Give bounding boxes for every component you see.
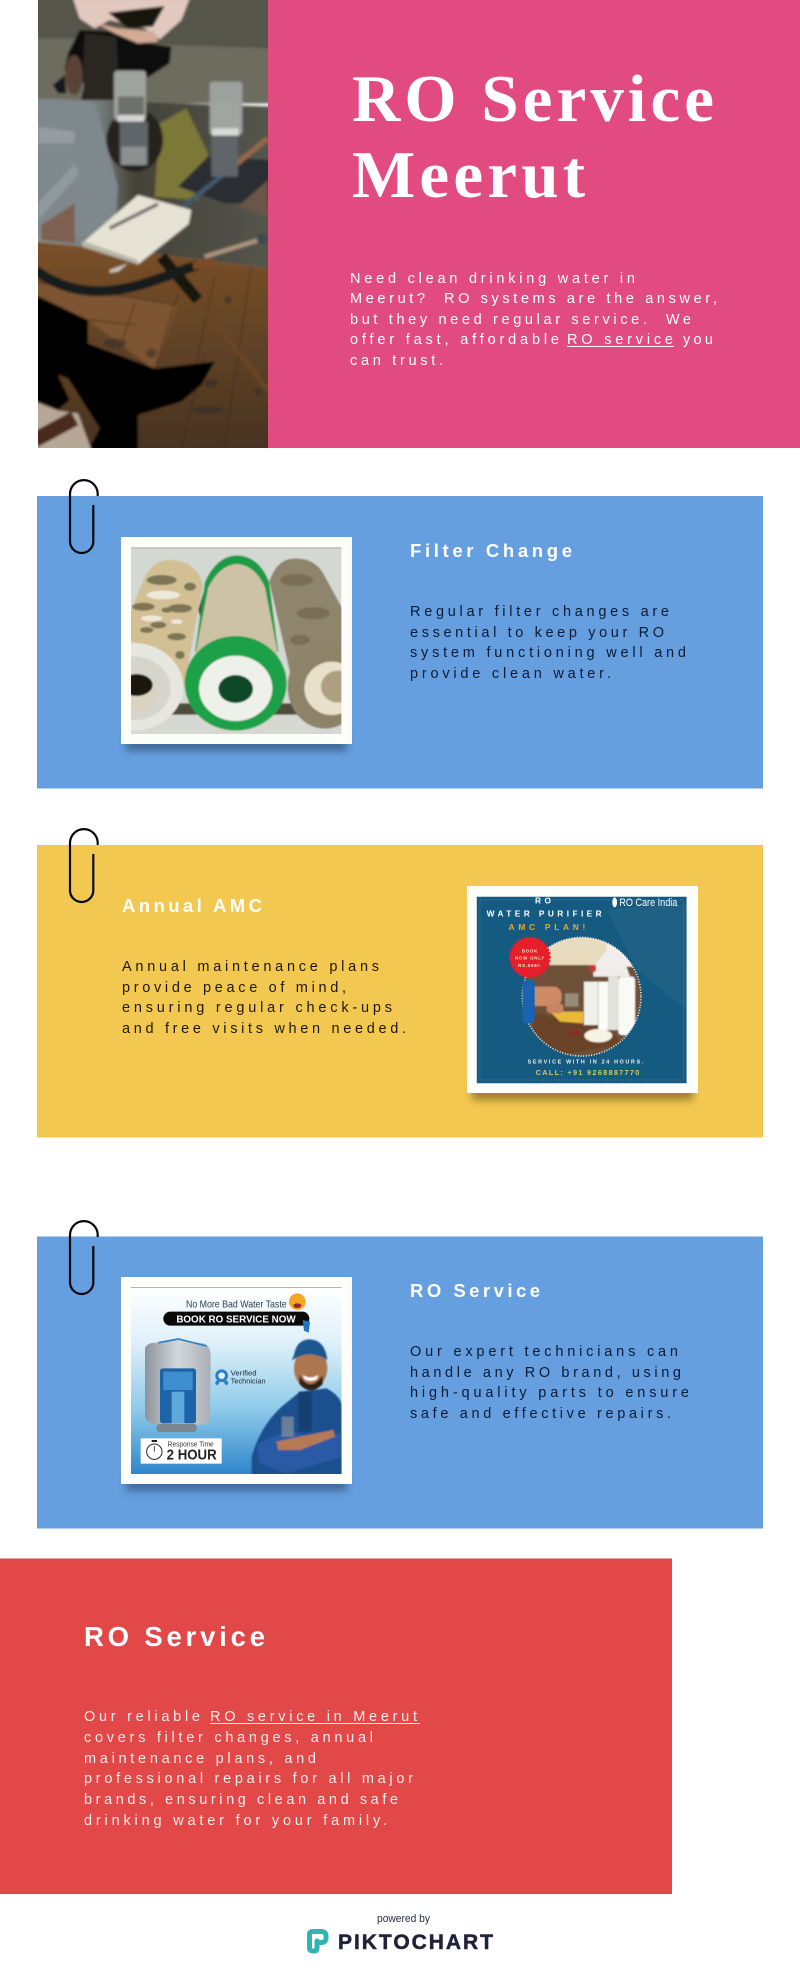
hero intro text: RO service (567, 332, 673, 348)
description: ro service summary: RO service in Meerut (210, 1709, 417, 1725)
description: ro service summary (84, 1709, 420, 1829)
description: annual amc (122, 959, 406, 1037)
framed poster: water purifier AMC plan (467, 886, 698, 1100)
hero intro text: Meerut? RO systems are the answer, (350, 291, 717, 307)
hero intro text: offer fast, affordable (350, 332, 559, 348)
response time box: Response Time (168, 1442, 214, 1449)
description: annual amc: and free visits when needed. (122, 1021, 406, 1037)
icon: Piktochart logo (310, 1932, 326, 1951)
hero pink background (268, 0, 800, 448)
description: ro service card: safe and effective repairs. (410, 1406, 671, 1422)
verified technician badge (215, 1369, 266, 1385)
description: ro service summary: professional repairs for all major (84, 1771, 413, 1787)
panel: annual amc (37, 829, 763, 1138)
poster contact: CALL: +91 9268887770 (536, 1068, 639, 1077)
hero intro text: you (683, 332, 713, 348)
poster brand (612, 897, 678, 908)
panel: hero (35, 0, 800, 453)
verified technician badge: Verified (231, 1369, 257, 1378)
technician (252, 1339, 342, 1475)
red price badge: BOOK (522, 949, 538, 954)
poster headline: AMC PLAN! (509, 922, 585, 932)
panel: ro service card (37, 1221, 763, 1528)
heading: filter change: Filter Change (410, 540, 572, 561)
description: filter change: system functioning well and (410, 645, 686, 661)
description: ro service summary: brands, ensuring clean and safe (84, 1792, 398, 1808)
description: filter change: Regular filter changes are (410, 604, 669, 620)
description: filter change: essential to keep your RO (410, 625, 664, 641)
red price badge: NOW ONLY (515, 956, 545, 961)
powered by label: powered by (377, 1913, 430, 1925)
panel: ro service summary (0, 1558, 672, 1894)
hero intro text: but they need regular service. We (350, 312, 691, 328)
emoji (289, 1293, 306, 1310)
description: annual amc: Annual maintenance plans (122, 959, 379, 975)
panel: filter change (37, 480, 763, 788)
hero title: RO Service (352, 62, 714, 136)
water purifier (145, 1339, 211, 1432)
description: filter change (410, 604, 686, 682)
icon: paperclip (70, 1221, 98, 1294)
footer: powered by Piktochart (310, 1913, 493, 1954)
summary red background (0, 1558, 672, 1894)
description: ro service card (410, 1344, 689, 1422)
description: ro service summary: drinking water for your family. (84, 1813, 387, 1829)
book button: BOOK RO SERVICE NOW (176, 1314, 296, 1325)
wordmark: PIKTOCHART (338, 1931, 493, 1954)
red price badge: RS.999/- (518, 963, 542, 968)
verified technician badge: Technician (231, 1376, 266, 1385)
hero title (352, 62, 714, 212)
poster contact: SERVICE WITH IN 24 HOURS. (528, 1059, 644, 1065)
poster contact (528, 1060, 643, 1075)
heading: ro service summary: RO Service (84, 1621, 265, 1652)
red price badge (511, 938, 549, 977)
description: ro service summary: maintenance plans, and (84, 1751, 316, 1767)
description: ro service card: handle any RO brand, using (410, 1365, 681, 1381)
framed photo: three used filter cartridges (121, 537, 352, 756)
annual amc background (37, 845, 763, 1138)
description: annual amc: ensuring regular check-ups (122, 1000, 392, 1016)
hero photo: meeting at a glass table (35, 0, 271, 453)
glasses (114, 71, 146, 121)
description: ro service summary: Our reliable (84, 1709, 200, 1725)
icon: paperclip (70, 829, 98, 902)
description: ro service card: high-quality parts to ensure (410, 1385, 689, 1401)
hero intro text: Need clean drinking water in (350, 271, 635, 287)
response time box (141, 1438, 222, 1464)
heading: annual amc: Annual AMC (122, 895, 262, 916)
poster photo circle (520, 937, 643, 1057)
description: filter change: provide clean water. (410, 666, 611, 682)
poster headline: WATER PURIFIER (487, 909, 602, 919)
hero intro text: can trust. (350, 353, 443, 369)
poster brand: RO Care India (619, 897, 678, 909)
description: annual amc: provide peace of mind, (122, 980, 346, 996)
hero intro text (350, 271, 717, 369)
book button (163, 1312, 310, 1333)
framed poster: book RO service (121, 1277, 352, 1491)
response time box: 2 HOUR (167, 1448, 217, 1464)
poster headline (486, 898, 602, 930)
description: ro service card: Our expert technicians can (410, 1344, 678, 1360)
icon: paperclip (70, 480, 98, 553)
ro service card background (37, 1236, 763, 1528)
description: ro service summary: covers filter changes, annual (84, 1730, 373, 1746)
poster headline: RO (535, 896, 552, 906)
heading: ro service card: RO Service (410, 1280, 540, 1301)
hero title: Meerut (352, 138, 586, 212)
filter change background (37, 496, 763, 788)
tagline: No More Bad Water Taste (186, 1300, 287, 1311)
